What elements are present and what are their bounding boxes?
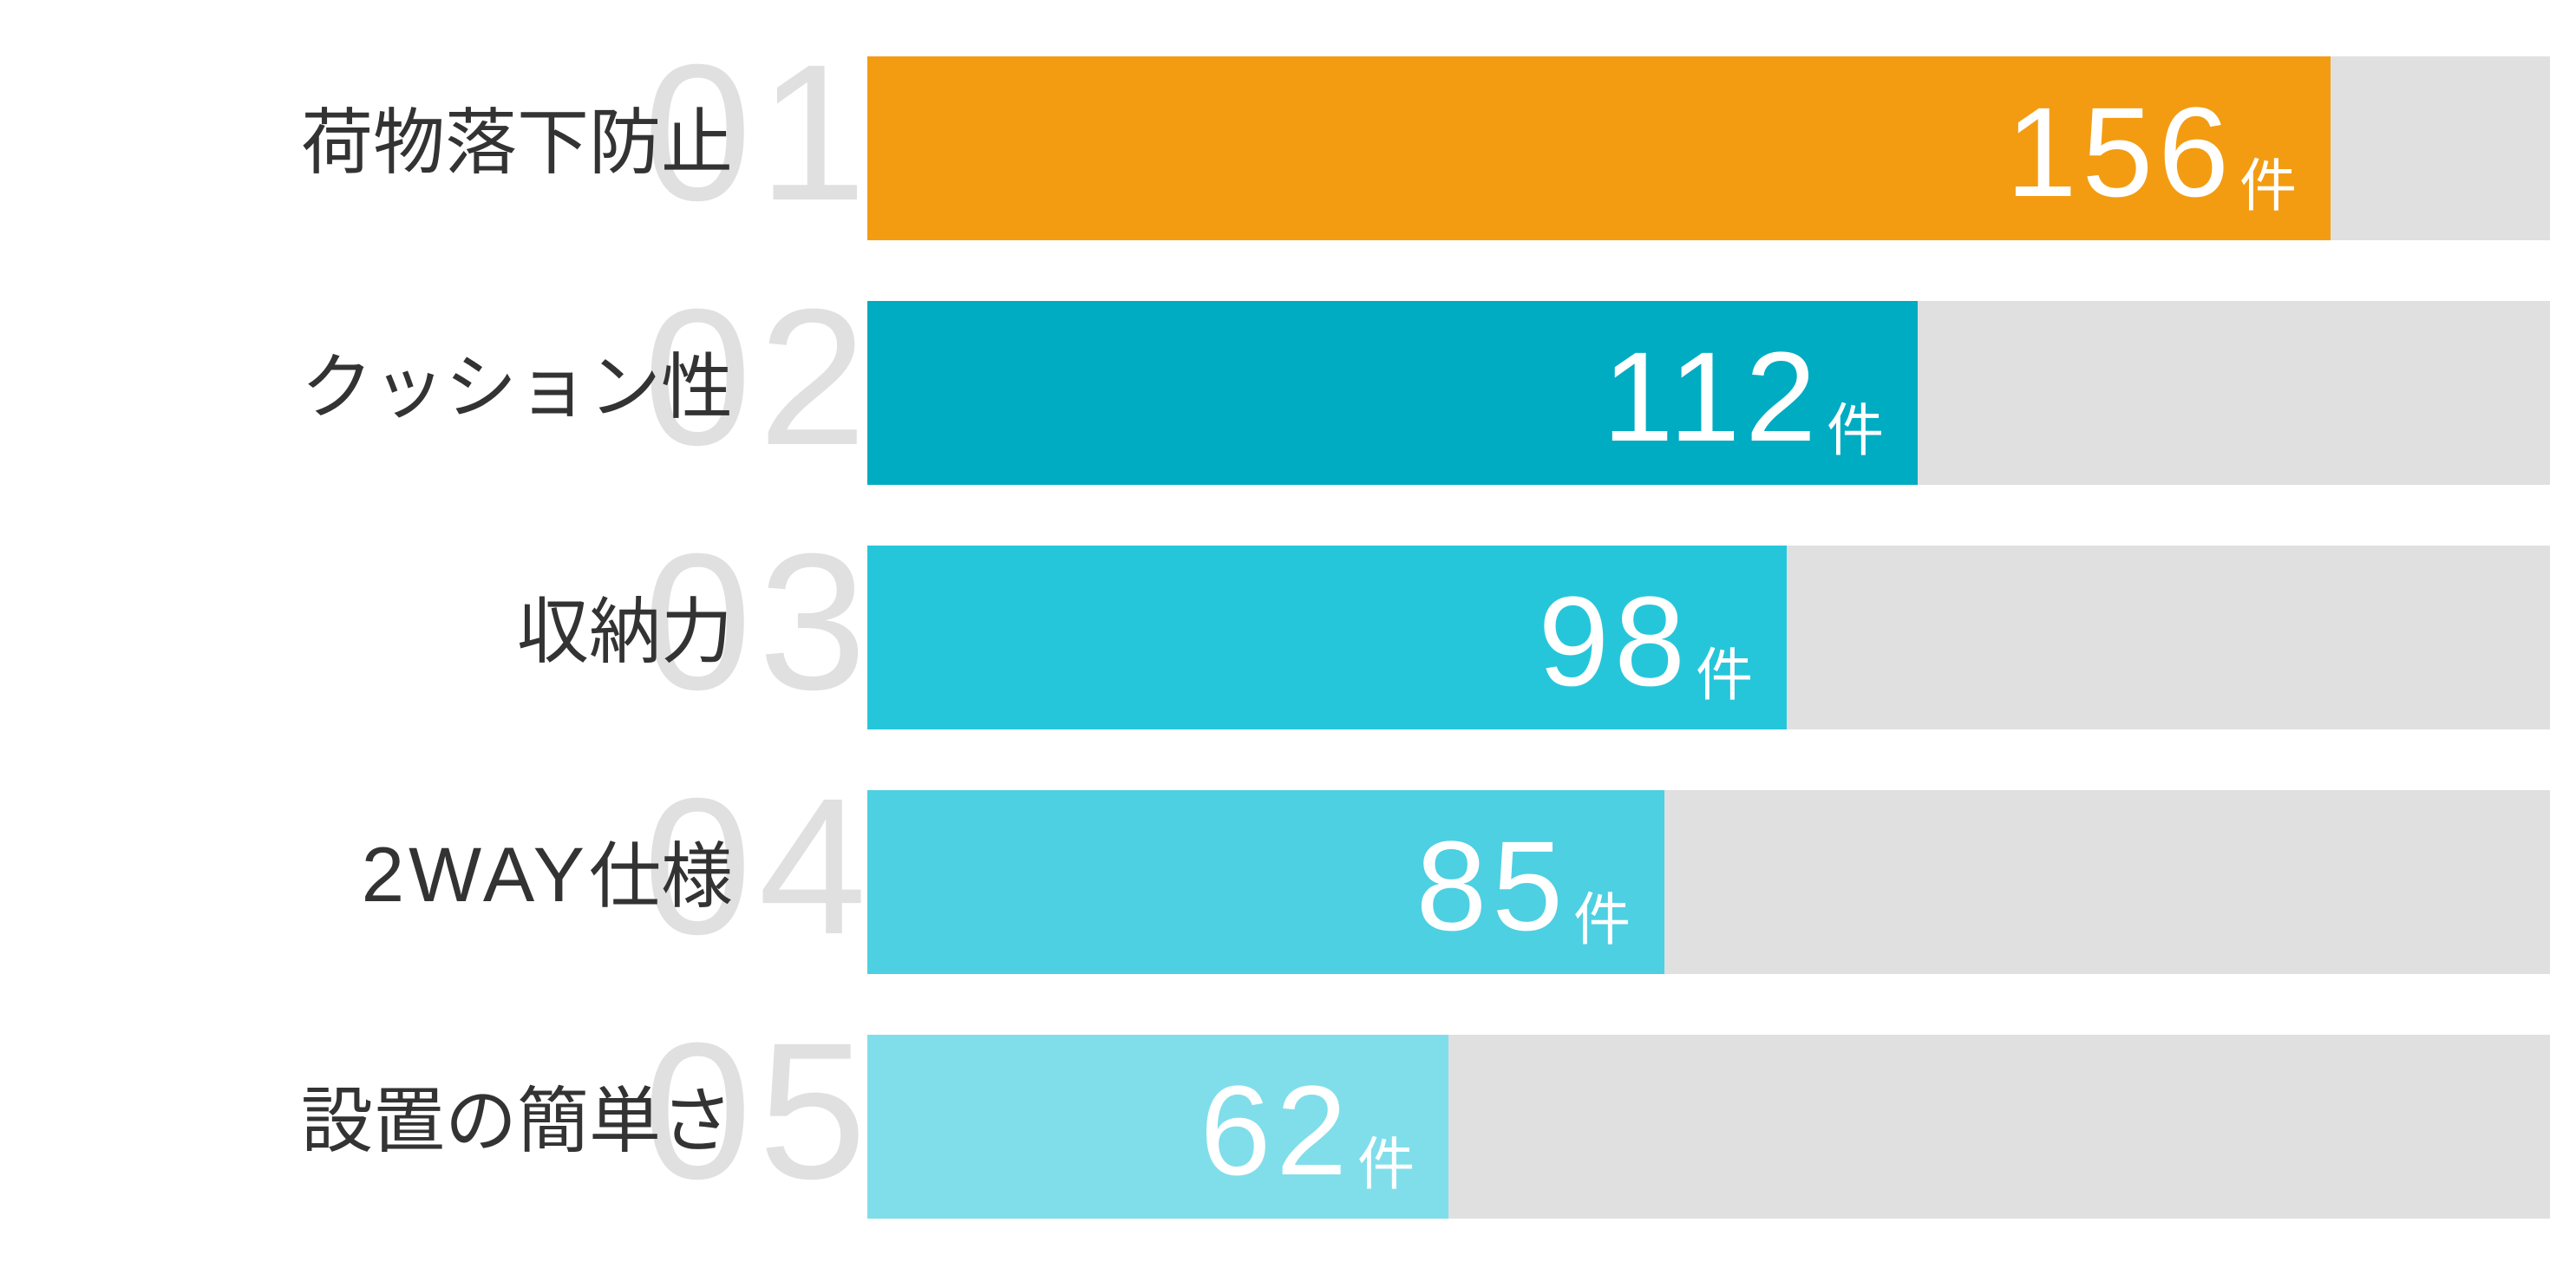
bar track 3 <box>867 546 2550 729</box>
value 112件: 112件 <box>1603 326 1884 468</box>
value 156件: 156件 <box>2006 82 2297 224</box>
value 62件: 62件 <box>1200 1060 1415 1202</box>
row 4: 2WAY仕様 <box>362 758 2550 975</box>
row 3: 収納力 <box>517 513 2550 730</box>
bar fill 156件 <box>867 56 2331 240</box>
label: 荷物落下防止: 荷物落下防止 <box>301 102 733 183</box>
bar fill 112件 <box>867 301 1918 485</box>
label: 設置の簡単さ: 設置の簡単さ <box>301 1081 733 1161</box>
rank number 03: 03 <box>644 513 873 730</box>
bar fill 98件 <box>867 546 1787 729</box>
bar track 5 <box>867 1035 2550 1219</box>
bar fill 62件 <box>867 1035 1448 1219</box>
rank number 04: 04 <box>644 758 873 975</box>
row 1: 荷物落下防止 <box>301 24 2550 241</box>
bar track 1 <box>867 56 2550 240</box>
label: クッション性: クッション性 <box>301 347 733 428</box>
row 5: 設置の簡単さ <box>301 1003 2550 1219</box>
rank number 05: 05 <box>644 1003 873 1219</box>
rank number 02: 02 <box>644 269 873 486</box>
value 85件: 85件 <box>1415 815 1631 958</box>
bar track 4 <box>867 790 2550 974</box>
row 2: クッション性 <box>301 269 2550 486</box>
bar track 2 <box>867 301 2550 485</box>
label: 2WAY仕様: 2WAY仕様 <box>362 831 733 918</box>
bar fill 85件 <box>867 790 1664 974</box>
rank number 01: 01 <box>644 24 873 241</box>
label: 収納力: 収納力 <box>517 592 733 672</box>
value 98件: 98件 <box>1538 571 1753 713</box>
